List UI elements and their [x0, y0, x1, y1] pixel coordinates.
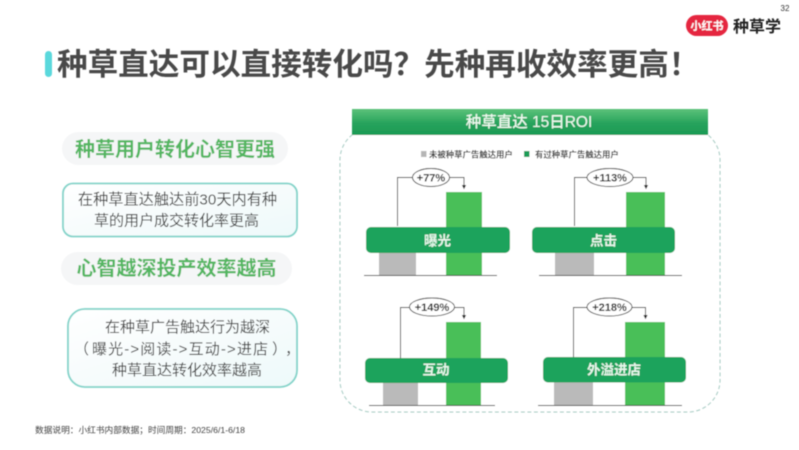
- bar chart: off-site store visit: 外溢进店: [587, 362, 641, 378]
- chart heading: 种草直达 15日ROI: [466, 113, 592, 131]
- text block: conversion callout: [63, 184, 297, 236]
- text block: efficiency callout: [68, 309, 300, 387]
- bar chart: off-site store visit: +218%: [592, 302, 627, 314]
- text block: efficiency callout: （: [74, 341, 89, 358]
- legend: 有过种草广告触达用户: [535, 150, 619, 160]
- bar chart: click: [532, 168, 682, 276]
- logo: xiaohongshu zhongcaoxue: 小红书: [690, 18, 724, 32]
- footnote: 数据说明：小红书内部数据；时间周期：2025/6/1-6/18: [35, 424, 245, 435]
- chart heading: [352, 109, 708, 135]
- text block: efficiency callout: 曝光->阅读->互动->进店: [92, 341, 268, 358]
- text block: efficiency callout: 在种草广告触达行为越深: [105, 319, 270, 336]
- bar chart: click: 点击: [590, 232, 617, 248]
- bar chart: click: +113%: [593, 172, 627, 184]
- text block: efficiency callout: ）: [272, 341, 287, 358]
- title: 种草直达可以直接转化吗？先种再收效率更高！: [57, 48, 699, 82]
- bar chart: interaction: +149%: [415, 302, 449, 314]
- panel: left heading 1: [62, 132, 288, 165]
- text block: conversion callout: 草的用户成交转化率更高: [94, 212, 259, 230]
- panel: left heading 2: [61, 252, 292, 285]
- panel: left heading 2: 心智越深投产效率越高: [76, 256, 276, 280]
- page number: 32: [781, 4, 790, 13]
- bar chart: exposure: +77%: [417, 172, 445, 184]
- panel: left heading 1: 种草用户转化心智更强: [75, 137, 275, 161]
- panel: ROI chart frame: [340, 128, 720, 412]
- logo: xiaohongshu zhongcaoxue: 种草学: [733, 17, 781, 36]
- legend: 未被种草广告触达用户: [429, 150, 513, 160]
- text block: conversion callout: 在种草直达触达前30天内有种: [78, 192, 277, 208]
- text block: efficiency callout: ，: [285, 341, 300, 358]
- legend: [421, 150, 619, 160]
- text block: efficiency callout: 种草直达转化效率越高: [112, 362, 262, 379]
- logo: xiaohongshu zhongcaoxue: [686, 15, 781, 36]
- bar chart: interaction: 互动: [422, 362, 450, 378]
- bar chart: interaction: [365, 298, 508, 406]
- bar chart: off-site store visit: [538, 298, 686, 406]
- bar chart: exposure: 曝光: [424, 232, 451, 248]
- bar chart: exposure: [364, 168, 510, 276]
